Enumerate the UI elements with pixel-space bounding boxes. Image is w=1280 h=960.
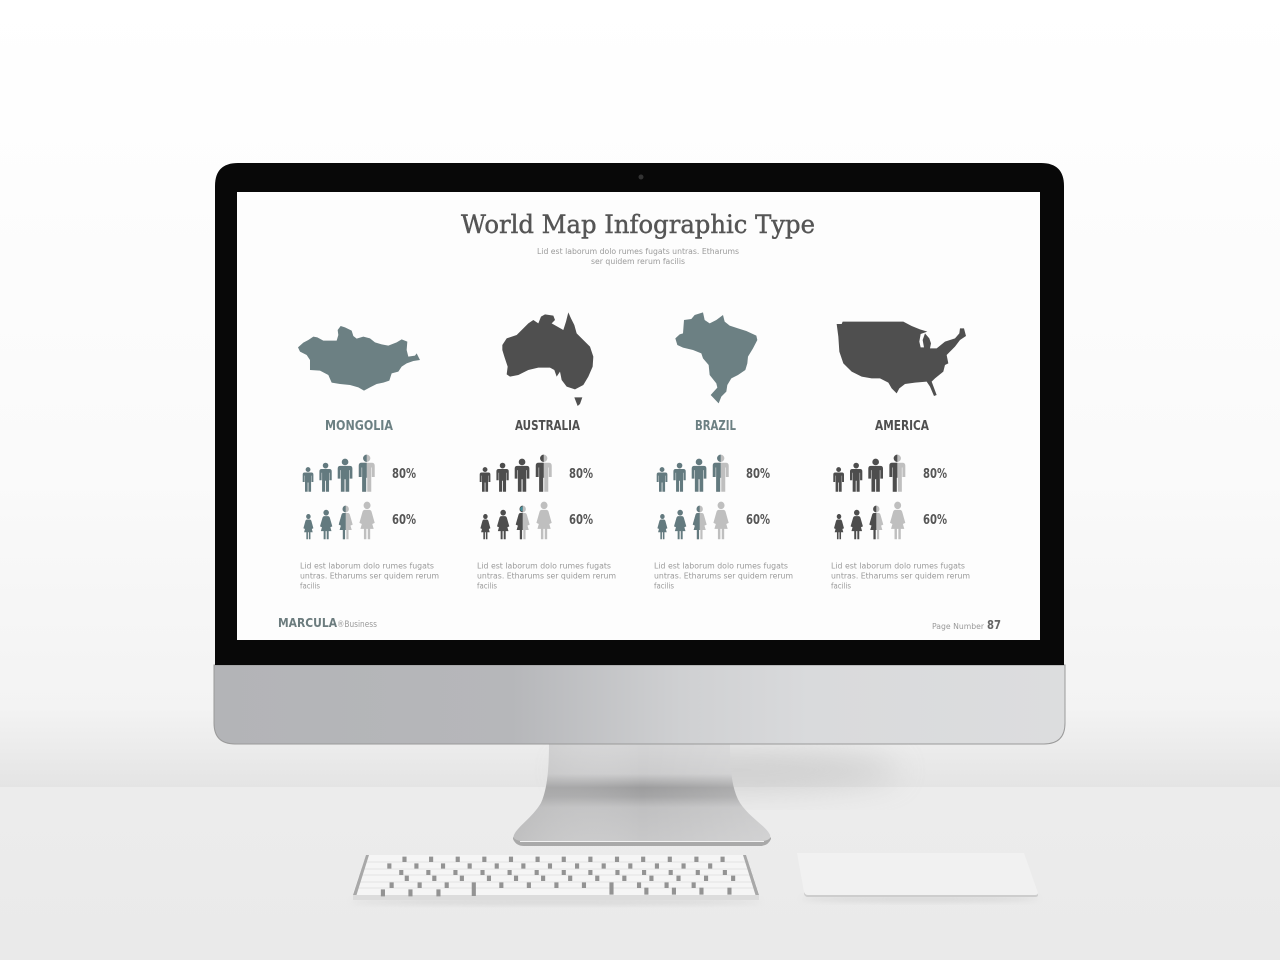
footer brand	[278, 616, 377, 630]
male percentage: 80%	[746, 467, 770, 482]
description	[300, 562, 439, 590]
panel: Australia	[477, 312, 616, 590]
description: facilis	[654, 582, 674, 590]
female icons	[834, 502, 905, 539]
female icons	[657, 502, 729, 539]
panel: Brazil	[654, 312, 793, 590]
title: World Map Infographic Type	[461, 210, 815, 239]
panel: America	[831, 322, 970, 590]
male percentage: 80%	[923, 467, 947, 482]
country name: BRAZIL	[695, 419, 736, 434]
female icons	[480, 502, 552, 539]
desk surface	[0, 787, 1280, 960]
country name: MONGOLIA	[325, 419, 393, 434]
monitor chin	[214, 665, 1065, 744]
description	[831, 562, 970, 590]
male percentage: 80%	[392, 467, 416, 482]
description: untras. Etharums ser quidem rerum	[477, 572, 616, 580]
description: Lid est laborum dolo rumes fugats	[477, 562, 611, 570]
female icons	[303, 502, 375, 539]
footer brand: ®Business	[337, 620, 377, 630]
panel: Mongolia	[298, 326, 439, 590]
description: untras. Etharums ser quidem rerum	[300, 572, 439, 580]
description: facilis	[477, 582, 497, 590]
webcam	[638, 174, 644, 180]
map: Brazil	[675, 312, 757, 403]
male icons	[657, 455, 729, 492]
map: America	[837, 322, 966, 396]
female percentage: 60%	[569, 513, 593, 528]
female percentage: 60%	[923, 513, 947, 528]
map: Australia	[502, 312, 593, 406]
monitor shadow on wall	[560, 750, 900, 790]
male icons	[303, 455, 375, 492]
footer brand: MARCULA	[278, 616, 338, 630]
country name: AUSTRALIA	[515, 419, 580, 434]
description: facilis	[300, 582, 320, 590]
page number: Page Number	[932, 622, 985, 631]
description: untras. Etharums ser quidem rerum	[831, 572, 970, 580]
monitor stand	[513, 744, 771, 846]
teal head accent	[520, 506, 522, 511]
page number	[932, 618, 1001, 632]
description: Lid est laborum dolo rumes fugats	[831, 562, 965, 570]
description: untras. Etharums ser quidem rerum	[654, 572, 793, 580]
trackpad	[797, 853, 1038, 902]
male icons	[833, 455, 905, 492]
description: Lid est laborum dolo rumes fugats	[300, 562, 434, 570]
screen panel	[237, 192, 1040, 640]
description	[477, 562, 616, 590]
monitor bezel	[215, 163, 1064, 665]
country name: AMERICA	[875, 419, 929, 434]
keyboard	[351, 855, 761, 905]
page number: 87	[987, 618, 1001, 632]
female percentage: 60%	[746, 513, 770, 528]
description: Lid est laborum dolo rumes fugats	[654, 562, 788, 570]
description	[654, 562, 793, 590]
subtitle: ser quidem rerum facilis	[591, 257, 685, 266]
map: Mongolia	[298, 326, 420, 391]
male percentage: 80%	[569, 467, 593, 482]
description: facilis	[831, 582, 851, 590]
female percentage: 60%	[392, 513, 416, 528]
subtitle: Lid est laborum dolo rumes fugats untras. Etharums	[537, 247, 739, 256]
subtitle	[537, 247, 739, 266]
male icons	[480, 455, 552, 492]
